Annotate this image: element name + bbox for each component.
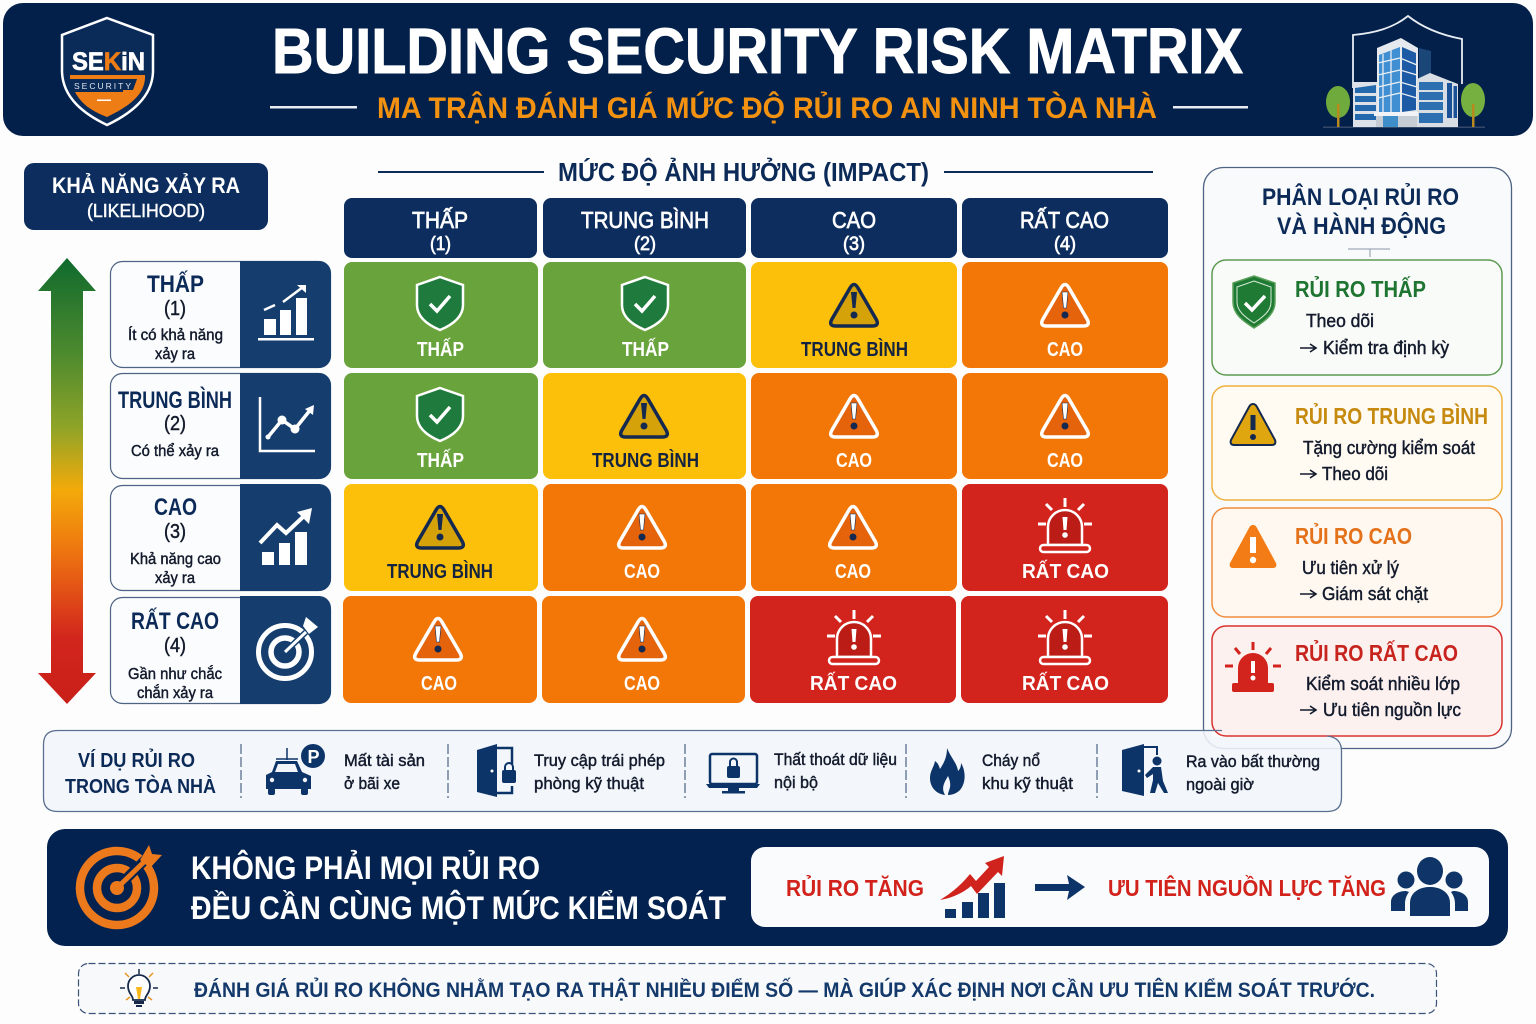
likelihood heading: (LIKELIHOOD) [87,201,205,221]
arrow: then monitor [1300,470,1316,478]
card: very high risk [1212,626,1502,736]
bottom note: ĐÁNH GIÁ RỦI RO KHÔNG NHẰM TẠO RA THẬT NHIỀU ĐIỂM SỐ — MÀ GIÚP XÁC ĐỊNH NƠI CẦN ƯU TIÊN KIỂM SOÁT TRƯỚC. [194,976,1375,1002]
logo: SEKIN Security shield [62,18,153,125]
likelihood row: high [110,484,331,591]
cell: impact 4 likelihood 1 high [962,262,1168,368]
cell: impact 4 likelihood 2 high: CAO [1047,450,1083,472]
text: internal data loss: Thất thoát dữ liệu [774,750,897,769]
likelihood row: low: xảy ra [155,346,195,363]
likelihood row: medium: (2) [164,413,186,435]
cell: impact 1 likelihood 3 medium [344,484,538,591]
card: high risk: RỦI RO CAO [1295,521,1412,549]
dot of warning sign [1250,434,1256,440]
likelihood row: medium: Có thể xảy ra [131,442,219,460]
impact column headers: CAO [832,207,876,233]
impact heading: MỨC ĐỘ ẢNH HƯỞNG (IMPACT) [558,156,929,187]
icon: bars with arrow [260,508,312,565]
likelihood heading: KHẢ NĂNG XẢY RA [52,173,240,198]
card: low risk: Theo dõi [1306,311,1374,331]
icon: car in parking [266,744,325,795]
arrow: then periodic check [1300,344,1316,352]
panel: risk examples in the building: VÍ DỤ RỦI RO [78,748,195,772]
panel: risk examples in the building: TRONG TÒA NHÀ [65,774,216,798]
likelihood row: low: Ít có khả năng [128,325,223,344]
likelihood row: high: xảy ra [155,570,195,587]
cell: impact 2 likelihood 4 high [542,596,745,703]
cell: impact 3 likelihood 2 high: CAO [836,450,872,472]
takeaway banner [47,829,1508,946]
likelihood row: very high: (4) [164,635,186,657]
text: fire: Cháy nổ [982,751,1040,770]
text: fire: khu kỹ thuật [982,774,1073,793]
header banner [3,3,1533,136]
card: high risk: Ưu tiên xử lý [1302,558,1399,578]
likelihood row: low [110,261,331,368]
icon: person walking through door [1122,744,1168,796]
cell: impact 4 likelihood 1 high: CAO [1047,339,1083,361]
bottom note [78,964,1436,1014]
text: internal data loss: nội bộ [774,773,818,792]
cell: impact 1 likelihood 1 low: THẤP [417,338,464,361]
card: high risk [1212,508,1502,617]
cell: impact 3 likelihood 3 high [751,484,957,591]
logo: SEKIN Security shield: SECURITY [74,81,131,91]
cell: impact 3 likelihood 3 high: CAO [835,561,871,583]
impact column headers: RẤT CAO [1020,206,1109,233]
text: abnormal access: ngoài giờ [1186,775,1254,794]
dot of orange warning sign [1250,557,1256,563]
likelihood row: very high [110,596,331,704]
text: lost property: ở bãi xe [344,774,400,793]
card: very high risk: RỦI RO RẤT CAO [1295,638,1458,666]
cell: impact 2 likelihood 2 medium [543,373,746,479]
cell: impact 4 likelihood 3 very high [962,484,1168,591]
icon: flame [930,748,965,795]
card: low risk: Kiểm tra định kỳ [1323,338,1449,358]
callout: risk up means priority up: ƯU TIÊN NGUỒN LỰC TĂNG [1108,874,1386,901]
card: high risk: Giám sát chặt [1322,584,1428,604]
text: fire [982,751,1073,793]
cell: impact 3 likelihood 1 medium [751,262,957,368]
cell: impact 1 likelihood 1 low [344,262,538,368]
cell: impact 1 likelihood 2 low [344,373,538,479]
cell: impact 2 likelihood 1 low [543,262,746,368]
panel: risk classification and actions: VÀ HÀNH ĐỘNG [1277,212,1446,240]
icon: protected building with trees [1323,16,1485,128]
panel: risk examples in the building [44,730,1342,812]
cell: impact 1 likelihood 4 high: CAO [421,673,457,695]
text: lost property [344,751,425,793]
cell: impact 1 likelihood 4 high [343,596,537,703]
icon: light bulb [120,969,158,1007]
icon: orange target [80,845,162,925]
takeaway banner: KHÔNG PHẢI MỌI RỦI RO [191,850,540,886]
icon: rising red arrow chart [940,856,1005,918]
text: unauthorized access: Truy cập trái phép [534,751,665,770]
impact column headers: THẤP [412,206,468,233]
likelihood row: high: Khả năng cao [130,551,221,568]
icon: rising bars [258,285,314,340]
cell: impact 4 likelihood 4 very high [961,596,1168,703]
card: medium risk [1212,386,1502,500]
text: abnormal access [1186,752,1320,794]
cell: impact 2 likelihood 3 high [543,484,746,591]
card: very high risk: Kiểm soát nhiều lớp [1306,674,1460,694]
card: medium risk: RỦI RO TRUNG BÌNH [1295,401,1488,429]
card: low risk [1212,260,1502,375]
cell: impact 2 likelihood 4 high: CAO [624,673,660,695]
cell: impact 2 likelihood 3 high: CAO [624,561,660,583]
risk matrix grid [343,262,1168,703]
arrow: leads to [1035,875,1085,900]
icon: line trend [260,397,315,451]
panel: risk classification and actions: PHÂN LOẠI RỦI RO [1262,182,1459,211]
icon: target [258,617,318,678]
cell: impact 3 likelihood 1 medium: TRUNG BÌNH [801,338,908,361]
impact column headers: (1) [430,234,451,255]
arrow: then close supervision [1300,590,1316,598]
callout: risk up means priority up: RỦI RO TĂNG [786,873,924,901]
icon: warning triangle [1231,404,1275,445]
text: abnormal access: Ra vào bất thường [1186,752,1320,771]
icon: orange warning triangle [1230,525,1276,568]
likelihood row: very high: Gần như chắc [128,664,222,683]
cell: impact 1 likelihood 3 medium: TRUNG BÌNH [387,560,493,583]
cell: impact 3 likelihood 2 high [751,373,957,479]
likelihood row: low: THẤP [147,270,204,298]
likelihood gradient arrow [38,258,96,704]
likelihood row: low: (1) [164,298,186,320]
icon: monitor with lock [706,754,760,794]
cell: impact 3 likelihood 4 very high [750,596,956,703]
logo: SEKIN Security shield: SEKiN [72,48,145,76]
cell: impact 2 likelihood 1 low: THẤP [622,338,669,361]
likelihood row: high: (3) [164,521,186,543]
icon: car in parking: P [308,747,320,767]
icon: people group [1391,857,1468,916]
likelihood row: medium [110,373,331,479]
subtitle: MA TRẬN ĐÁNH GIÁ MỨC ĐỘ RỦI RO AN NINH TÒA NHÀ [377,91,1157,125]
likelihood heading [24,163,268,230]
likelihood row: medium: TRUNG BÌNH [118,386,232,414]
likelihood row: very high: chắn xảy ra [137,683,213,702]
impact column headers: (4) [1054,234,1076,255]
text: unauthorized access [534,751,665,793]
takeaway banner: ĐỀU CẦN CÙNG MỘT MỨC KIỂM SOÁT [191,890,726,926]
impact column headers: (3) [843,234,865,255]
likelihood row: high: CAO [154,494,197,521]
arrow: then prioritize resources [1300,706,1316,714]
panel: risk classification and actions [1204,168,1512,748]
icon: door with lock [477,744,516,797]
cell: impact 3 likelihood 4 very high: RẤT CAO [810,672,897,695]
card: medium risk: Tặng cường kiểm soát [1303,438,1475,458]
cell: impact 4 likelihood 2 high [962,373,1168,479]
card: low risk: RỦI RO THẤP [1295,274,1426,302]
card: very high risk: Ưu tiên nguồn lực [1323,700,1461,720]
impact column headers [344,198,1168,258]
icon: red alarm [1225,642,1281,692]
text: unauthorized access: phòng kỹ thuật [534,774,644,793]
cell: impact 1 likelihood 2 low: THẤP [417,449,464,472]
text: lost property: Mất tài sản [344,751,425,770]
likelihood row: very high: RẤT CAO [131,607,219,635]
cell: impact 2 likelihood 2 medium: TRUNG BÌNH [592,449,699,472]
callout: risk up means priority up [751,847,1489,927]
text: internal data loss [774,750,897,792]
cell: impact 4 likelihood 3 very high: RẤT CAO [1022,560,1109,583]
impact column headers: TRUNG BÌNH [581,207,709,233]
impact column headers: (2) [634,234,656,255]
card: medium risk: Theo dõi [1322,464,1388,484]
title: BUILDING SECURITY RISK MATRIX [272,15,1243,87]
icon: green shield [1233,276,1275,328]
cell: impact 4 likelihood 4 very high: RẤT CAO [1022,672,1109,695]
